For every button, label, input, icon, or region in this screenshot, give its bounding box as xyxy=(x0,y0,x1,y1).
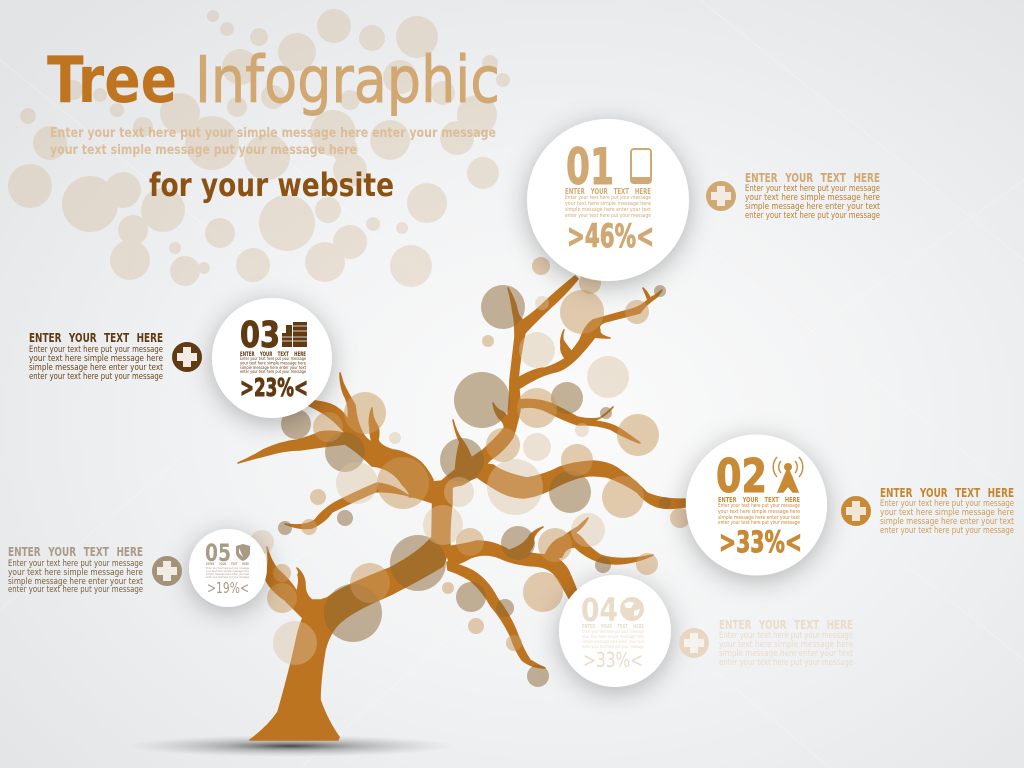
callout text xyxy=(29,331,164,382)
number 03: 03 xyxy=(240,315,280,356)
callout text: ENTER YOUR TEXT HERE xyxy=(29,331,163,345)
circle text xyxy=(565,187,652,219)
tree foliage bubbles: tan xyxy=(267,257,690,651)
icon: phone xyxy=(631,149,651,183)
percentage 23: >23%< xyxy=(240,373,308,402)
percentage 33: >33%< xyxy=(719,525,802,559)
percentage 19: >19%< xyxy=(207,579,249,597)
number 04: 04 xyxy=(581,591,618,629)
icon: plus xyxy=(172,342,202,372)
number 02: 02 xyxy=(716,449,767,503)
circle text: simple message here enter your text xyxy=(206,572,250,576)
callout: 03 xyxy=(29,331,202,382)
callout text: ENTER YOUR TEXT HERE xyxy=(745,171,880,185)
circle text: enter your text here put your message xyxy=(565,213,651,219)
circle text: your text here simple message here xyxy=(240,360,306,366)
circle text: ENTER YOUR TEXT HERE xyxy=(565,187,651,196)
panel: 01 circle xyxy=(527,119,689,281)
callout text: simple message here enter your text xyxy=(8,577,144,587)
icon: plus xyxy=(706,181,736,211)
circle text: Enter your text here put your message xyxy=(565,195,651,201)
title: Infographic xyxy=(195,44,500,118)
intro text xyxy=(50,126,496,158)
icon: shield xyxy=(236,544,250,561)
percentage 33: >33%< xyxy=(583,648,643,672)
circle text: Enter your text here put your message xyxy=(206,566,249,570)
tree foliage bubbles: pale xyxy=(250,296,629,665)
panel: 04 circle xyxy=(559,575,671,687)
circle text: ENTER YOUR TEXT HERE xyxy=(582,624,644,630)
callout: 05 xyxy=(8,545,182,595)
circle text: simple message here enter your text xyxy=(565,207,652,213)
circle text: simple message here enter your text xyxy=(718,515,800,521)
circle text: your text here simple message here xyxy=(582,634,644,639)
callout: 02 xyxy=(841,486,1015,536)
callout text xyxy=(8,545,144,595)
panel: 03 circle xyxy=(212,298,332,418)
callout text: Enter your text here put your message xyxy=(745,184,880,194)
circle text: enter your text here put your message xyxy=(582,644,644,649)
panel: 02 circle xyxy=(686,434,827,576)
circle text: enter your text here put your message xyxy=(240,369,306,375)
callout text: Enter your text here put your message xyxy=(8,559,143,569)
tree foliage bubbles: dark xyxy=(278,285,671,687)
callout text: your text here simple message here xyxy=(745,193,880,203)
circle text: ENTER YOUR TEXT HERE xyxy=(718,496,800,504)
circle text: Enter your text here put your message xyxy=(582,629,644,634)
panel: 05 circle xyxy=(189,529,267,607)
title xyxy=(47,44,500,118)
intro text: Enter your text here put your simple message here enter your message xyxy=(50,126,496,141)
circle text: your text here simple message here xyxy=(718,509,800,515)
callout text: your text here simple message here xyxy=(8,568,143,578)
icon: plus xyxy=(152,556,182,586)
icon: plus xyxy=(841,496,871,526)
callout text xyxy=(719,618,854,668)
circle text xyxy=(206,562,250,579)
icon: radio tower xyxy=(773,457,803,492)
circle text: simple message here enter your text xyxy=(582,639,644,644)
callout text: ENTER YOUR TEXT HERE xyxy=(719,618,853,632)
number 05: 05 xyxy=(205,539,231,567)
number 01: 01 xyxy=(566,138,614,196)
ground shadow xyxy=(125,735,455,757)
title: Tree xyxy=(47,44,177,118)
callout text xyxy=(880,486,1015,536)
circle text: enter your text here put your message xyxy=(718,520,800,526)
callout text: enter your text here put your message xyxy=(719,658,853,668)
callout text: your text here simple message here xyxy=(29,354,163,364)
callout text: Enter your text here put your message xyxy=(29,345,163,355)
intro text: your text simple message put your message here xyxy=(50,143,357,158)
callout text: your text here simple message here xyxy=(719,640,853,650)
callout text: enter your text here put your message xyxy=(745,211,880,221)
callout text: simple message here enter your text xyxy=(29,363,164,373)
circle text xyxy=(240,351,306,375)
callout: 04 xyxy=(679,618,854,668)
callout text xyxy=(745,171,881,221)
callout text: enter your text here put your message xyxy=(8,585,143,595)
callout text: enter your text here put your message xyxy=(29,372,163,382)
circle text: Enter your text here put your message xyxy=(240,356,306,362)
circle text: your text here simple message here xyxy=(565,201,652,207)
callout text: Enter your text here put your message xyxy=(719,631,853,641)
background bubble cloud xyxy=(8,9,510,287)
circle text: enter your text here put your message xyxy=(206,575,249,579)
percentage 46: >46%< xyxy=(567,217,654,255)
circle text: simple message here enter your text xyxy=(240,365,306,371)
circle text xyxy=(582,624,644,649)
subtitle: for your website xyxy=(149,166,394,204)
callout text: ENTER YOUR TEXT HERE xyxy=(8,545,143,559)
circle text: ENTER YOUR TEXT HERE xyxy=(240,351,306,358)
circle text: your text here simple message here xyxy=(206,569,249,573)
tree xyxy=(238,276,685,740)
circle text: Enter your text here put your message xyxy=(718,503,800,509)
circle text xyxy=(718,496,800,526)
icon: buildings xyxy=(282,322,307,347)
icon: plus xyxy=(679,628,709,658)
callout text: simple message here enter your text xyxy=(745,202,881,212)
icon: globe xyxy=(620,597,644,621)
callout text: simple message here enter your text xyxy=(719,649,854,659)
callout: 01 xyxy=(706,171,881,221)
circle text: ENTER YOUR TEXT HERE xyxy=(206,562,249,566)
